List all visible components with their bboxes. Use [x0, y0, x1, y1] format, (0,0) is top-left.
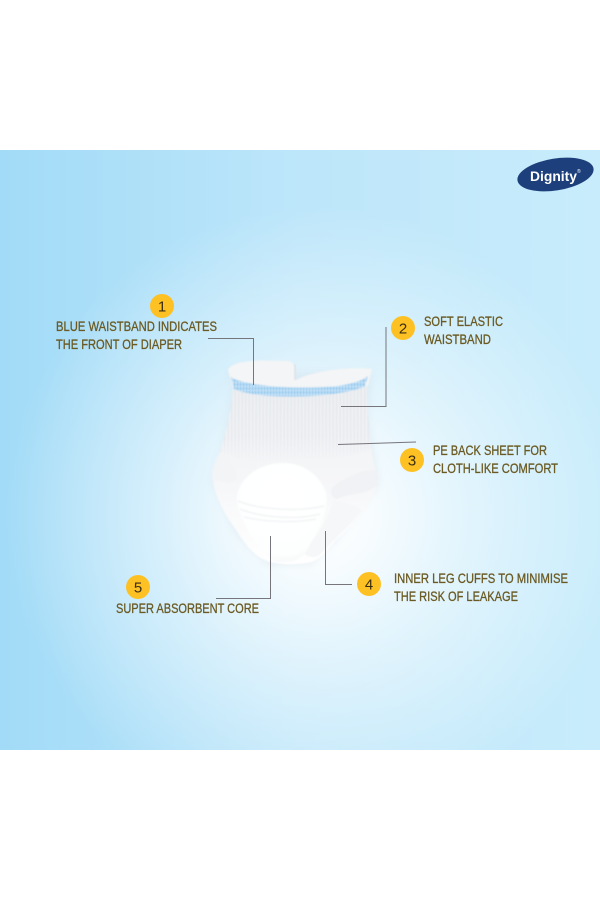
illustration: white pull-up diaper: [212, 360, 379, 565]
panel: blue gradient background: [0, 150, 600, 750]
callout 4: [357, 571, 568, 604]
callout 2: WAISTBAND: [424, 332, 491, 347]
icon: Dignity logo: ®: [577, 168, 581, 175]
icon: Dignity logo: [515, 153, 596, 196]
callout 5: [116, 575, 259, 616]
diaper rim inner fold: [294, 364, 296, 380]
callout 2: 2: [399, 320, 407, 338]
callout 5: 5: [134, 580, 142, 596]
callout 3: [400, 443, 558, 476]
callout 4: THE RISK OF LEAKAGE: [394, 589, 518, 604]
callout 3: 3: [408, 452, 416, 470]
right leg opening: [302, 500, 362, 557]
callout 3: PE BACK SHEET FOR: [433, 443, 547, 458]
icon: Dignity logo: Dignity: [530, 168, 577, 184]
diaper soft shadow: [212, 372, 379, 565]
callout 1: BLUE WAISTBAND INDICATES: [56, 319, 217, 334]
diaper back inner rim: [228, 360, 372, 388]
leader line 5: [216, 536, 270, 598]
leader line 1: [208, 338, 254, 385]
callout 5: SUPER ABSORBENT CORE: [116, 601, 259, 616]
callout 3: CLOTH-LIKE COMFORT: [433, 461, 558, 476]
callout 4: INNER LEG CUFFS TO MINIMISE: [394, 571, 568, 586]
waist ruching texture: [228, 406, 368, 439]
absorbent core pad: [237, 463, 327, 562]
callout 2: SOFT ELASTIC: [424, 314, 503, 329]
blue waistband: [231, 376, 368, 397]
core stitch lines: [238, 501, 324, 521]
callout 1: THE FRONT OF DIAPER: [56, 337, 182, 352]
left leg ruffle: [214, 453, 237, 482]
leader line 4: [326, 531, 352, 584]
leader line 3: [338, 442, 416, 444]
diaper body: [212, 386, 378, 564]
leader line 2: [341, 327, 386, 406]
callout 1: [56, 294, 217, 352]
right leg ruffle: [331, 470, 378, 499]
callout 4: 4: [365, 576, 373, 594]
callout 1: 1: [158, 298, 166, 316]
callout 2: [391, 314, 503, 347]
